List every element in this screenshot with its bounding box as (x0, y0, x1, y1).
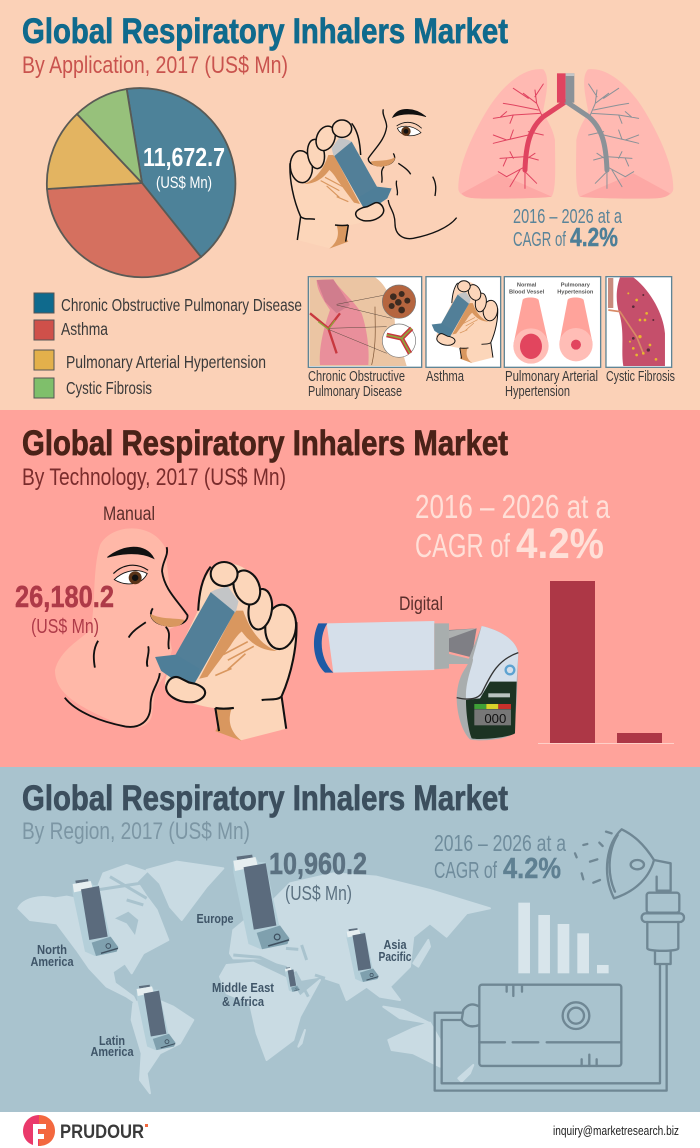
CAGR text: application: 4.2% (570, 222, 618, 252)
inhaler icons by region (73, 855, 379, 1050)
thumbnail: pulmonary arterial hypertension: Blood Vessel (509, 289, 545, 295)
CAGR text: application (513, 206, 623, 252)
region labels: Europe (196, 911, 234, 926)
footer logo (23, 1115, 148, 1146)
region labels: America (30, 954, 74, 969)
panel: application section background (0, 0, 700, 410)
region labels: North (37, 942, 67, 957)
region labels: & Africa (222, 994, 265, 1009)
unit: manual: (US$ Mn) (31, 616, 99, 638)
illustration: digital inhaler (314, 621, 518, 740)
region labels: Pacific (378, 949, 412, 964)
thumbnail captions: Chronic Obstructive (308, 368, 405, 385)
thumbnail captions: Pulmonary Disease (308, 383, 402, 400)
bar chart: technology (538, 581, 674, 744)
CAGR text: technology: 2016 – 2026 at a (415, 488, 611, 525)
subtitle: region: By Region, 2017 (US$ Mn) (22, 818, 250, 845)
CAGR text: application: CAGR of (513, 229, 566, 251)
value: manual: 26,180.2 (15, 579, 114, 614)
illustration: man using inhaler (289, 109, 457, 249)
CAGR text: region: CAGR of (434, 857, 497, 883)
thumbnail captions: Hypertension (505, 383, 570, 400)
region labels: Latin (99, 1033, 125, 1048)
CAGR text: application: 2016 – 2026 at a (513, 206, 623, 228)
title: application: Global Respiratory Inhalers Market (22, 12, 508, 51)
panel: technology section background (0, 410, 700, 767)
region labels (30, 911, 412, 1059)
legend: Cystic Fibrosis (66, 378, 152, 398)
illustration: face skin (55, 528, 188, 728)
CAGR text: region (434, 830, 566, 885)
subtitle: technology: By Technology, 2017 (US$ Mn) (22, 464, 286, 491)
pie value label: 11,672.7 (143, 142, 225, 172)
title: region: Global Respiratory Inhalers Market (22, 779, 508, 818)
legend (34, 293, 302, 398)
nebulizer outline (435, 829, 684, 1091)
pie unit label: (US$ Mn) (156, 173, 212, 192)
panel: footer background (0, 1112, 700, 1148)
thumbnail captions (308, 368, 675, 400)
region labels: America (90, 1044, 134, 1059)
label: digital: Digital (399, 594, 443, 615)
CAGR text: region: 2016 – 2026 at a (434, 830, 566, 856)
legend: Asthma (61, 319, 108, 339)
world map (18, 862, 490, 1093)
legend: Chronic Obstructive Pulmonary Disease (61, 295, 302, 315)
bars (518, 903, 609, 973)
thumbnail captions: Pulmonary Arterial (505, 368, 598, 385)
illustration: lungs (458, 69, 673, 199)
pie chart: application share (47, 88, 235, 277)
thumbnail: pulmonary arterial hypertension: Pulmonary (561, 283, 591, 289)
CAGR text: technology (415, 488, 611, 568)
value: europe: 10,960.2 (269, 846, 367, 881)
CAGR text: region: 4.2% (503, 853, 561, 885)
title: technology: Global Respiratory Inhalers Market (22, 424, 508, 463)
label: manual: Manual (103, 504, 155, 525)
legend: Pulmonary Arterial Hypertension (66, 352, 266, 372)
region labels: Asia (384, 937, 407, 952)
thumbnail: asthma (426, 277, 501, 367)
thumbnail: pulmonary arterial hypertension: Hypertension (557, 289, 594, 295)
thumbnail: pulmonary arterial hypertension: Normal (517, 283, 537, 289)
CAGR text: technology: CAGR of (415, 527, 511, 564)
unit: europe: (US$ Mn) (285, 883, 352, 905)
thumbnails: application types (308, 277, 672, 367)
illustration: manual inhaler use (65, 547, 298, 741)
thumbnail: chronic obstructive pulmonary disease (308, 277, 422, 367)
thumbnail: pulmonary arterial hypertension (504, 277, 601, 367)
illustration: digital inhaler: 000 (484, 711, 506, 726)
CAGR text: technology: 4.2% (516, 520, 604, 568)
footer logo: PRUDOUR (60, 1122, 144, 1143)
thumbnail: cystic fibrosis (606, 277, 672, 367)
panel: region section background (0, 767, 700, 1112)
region labels: Middle East (212, 980, 275, 995)
thumbnail captions: Asthma (426, 368, 464, 385)
illustration: nebulizer with bars (435, 829, 684, 1091)
subtitle: application: By Application, 2017 (US$ Mn) (22, 52, 288, 79)
